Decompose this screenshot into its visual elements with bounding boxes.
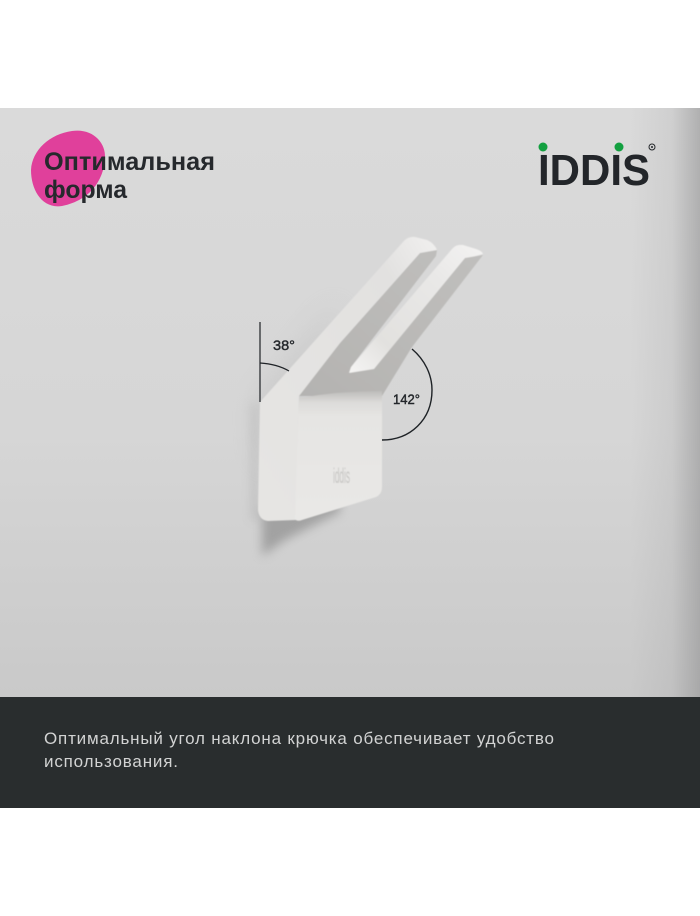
wall hook: iddis bbox=[333, 465, 350, 488]
caption panel bbox=[0, 697, 700, 808]
angle marker: 38 degrees bbox=[260, 322, 295, 402]
blob behind heading bbox=[31, 131, 105, 206]
angle marker: 142 degrees bbox=[382, 349, 432, 440]
logo: iddis: IDDIS bbox=[538, 146, 650, 195]
heading bbox=[44, 148, 215, 204]
angle marker: 38 degrees: 38° bbox=[273, 338, 295, 353]
hook: underside of both arms bbox=[299, 250, 483, 396]
heading: Оптимальная bbox=[44, 148, 215, 176]
hook: first arm upper face and side band bbox=[258, 237, 437, 521]
wall photo background bbox=[0, 108, 700, 697]
hook: front plate bbox=[295, 391, 382, 521]
heading: форма bbox=[44, 176, 128, 204]
caption text: использования. bbox=[44, 752, 178, 771]
caption text bbox=[44, 729, 554, 771]
caption text: Оптимальный угол наклона крючка обеспечивает удобство bbox=[44, 729, 554, 748]
hook: second arm upper face and slot bbox=[349, 245, 483, 373]
wall hook bbox=[258, 237, 483, 521]
angle marker: 142 degrees: 142° bbox=[393, 392, 420, 407]
